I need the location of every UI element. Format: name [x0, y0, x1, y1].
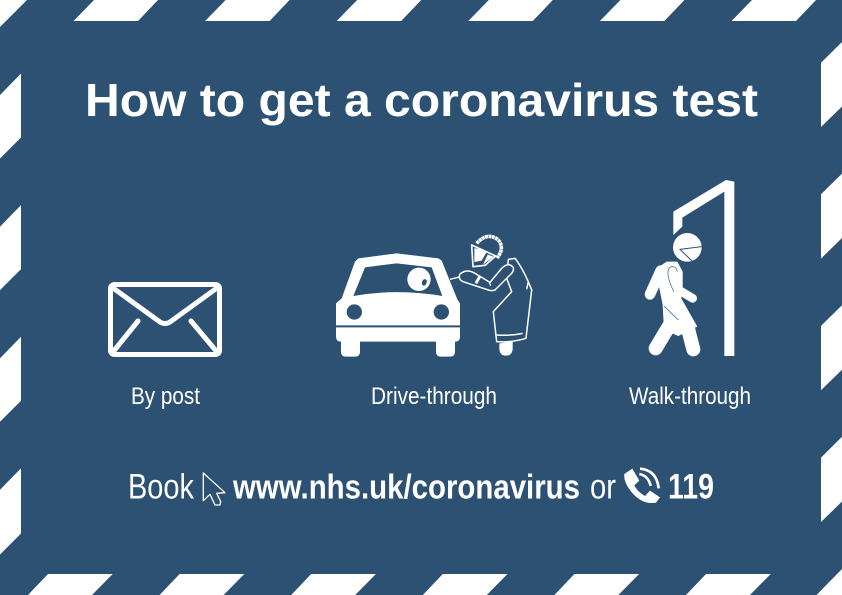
icon: tester head: [472, 236, 501, 267]
booking line: [128, 468, 714, 506]
back arm: [650, 271, 661, 294]
headlights: [347, 304, 362, 320]
text: book: Book: [128, 468, 194, 506]
icon: phone: [624, 469, 660, 503]
driver head: [407, 268, 431, 291]
label: by post: By post: [131, 383, 200, 410]
icon: walk-through gate frame: [673, 180, 734, 356]
icon: tester in gown and visor: [450, 258, 532, 356]
car body: [336, 253, 460, 325]
face shield: [472, 245, 496, 267]
legs: [656, 323, 671, 348]
title: How to get a coronavirus test: [85, 74, 758, 126]
swab: [450, 277, 461, 279]
car bumper and wheels: [336, 327, 460, 357]
text: phone number: 119: [668, 468, 714, 506]
label: drive-through: Drive-through: [371, 383, 497, 410]
text: or: or: [590, 468, 616, 506]
text: web address: www.nhs.uk/coronavirus: [232, 468, 580, 506]
front arm: [675, 275, 693, 298]
icon: cursor: [203, 473, 225, 505]
label: walk-through: Walk-through: [629, 383, 751, 410]
gown: [493, 258, 532, 342]
arm: [459, 265, 513, 291]
foot: [499, 342, 513, 356]
icon: walking person: [650, 233, 702, 349]
icon: car with driver: [336, 253, 460, 357]
hood: [477, 236, 501, 258]
head with mask: [673, 233, 702, 262]
torso: [657, 262, 697, 336]
windscreen: [353, 263, 442, 296]
icon: envelope: [110, 284, 220, 354]
